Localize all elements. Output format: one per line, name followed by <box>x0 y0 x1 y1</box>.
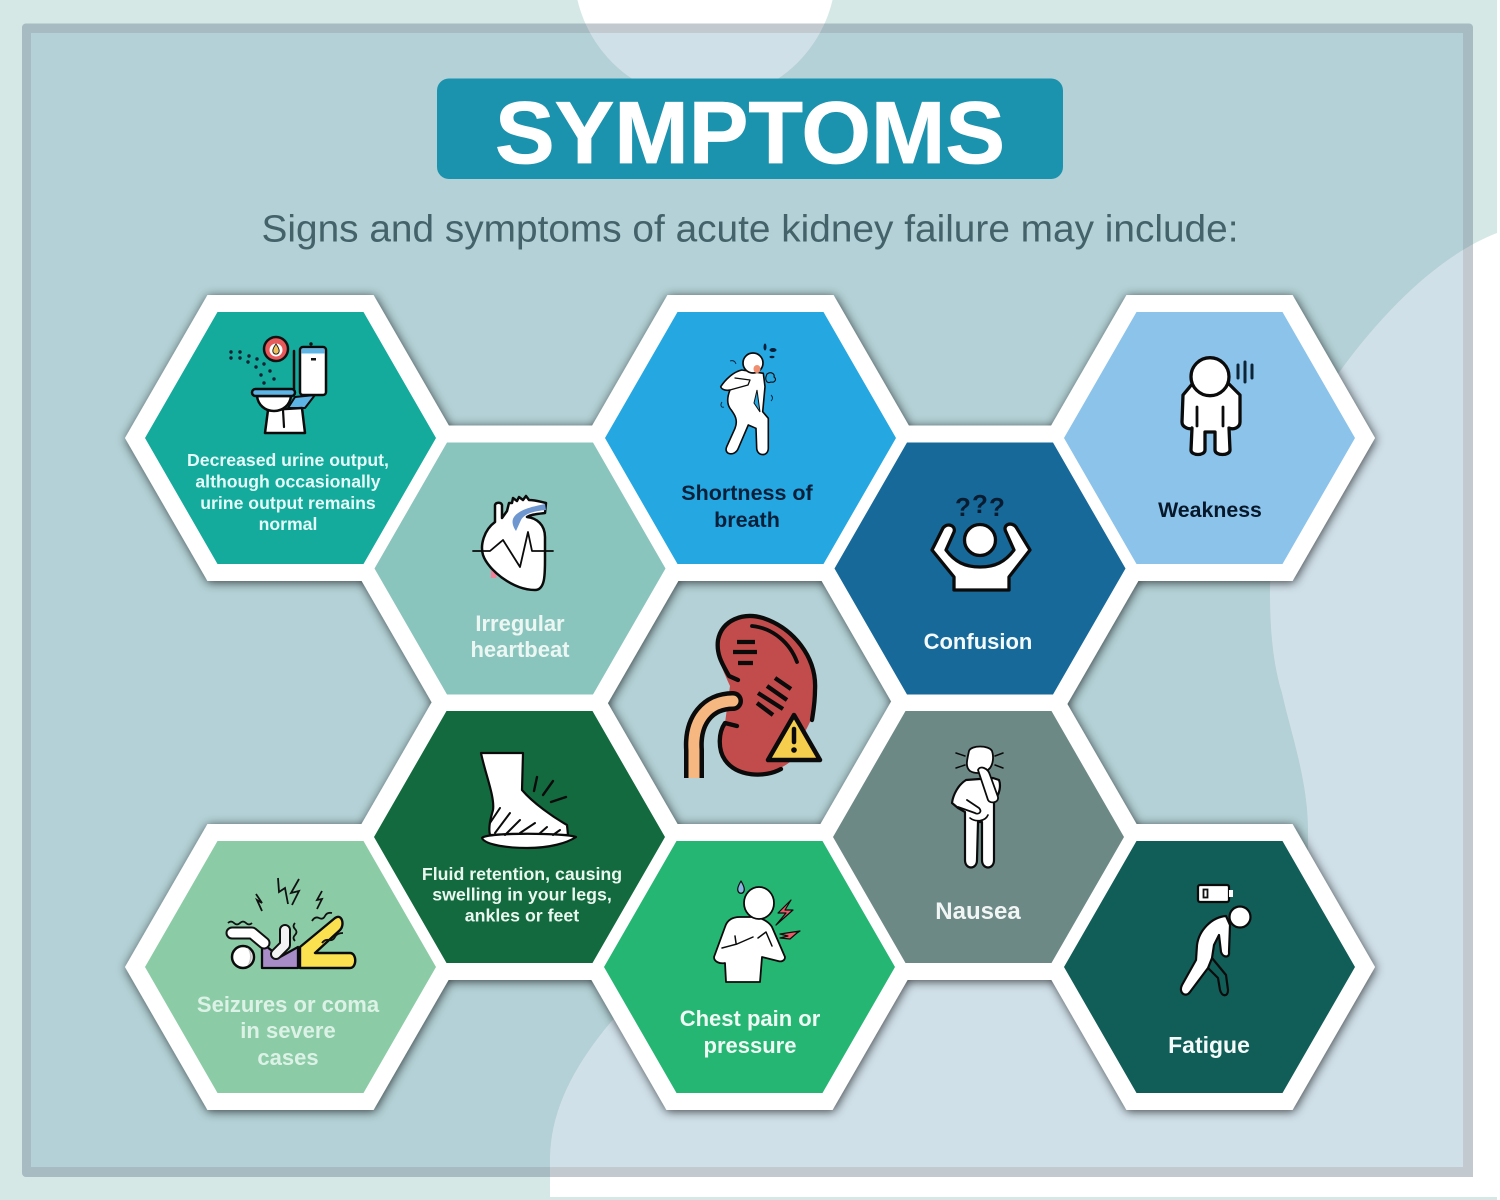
icon: person with question marks: ? <box>972 489 988 519</box>
label: pressure <box>704 1033 796 1058</box>
icon: swollen foot <box>481 753 576 848</box>
label: ankles or feet <box>465 906 579 926</box>
label: Fluid retention, causing <box>422 864 622 884</box>
icon: person with chest pain <box>714 881 800 982</box>
label <box>470 611 570 662</box>
label: Confusion <box>924 629 1032 654</box>
white hexagon honeycomb backing <box>125 295 1375 1110</box>
label: Irregular <box>475 611 565 636</box>
panel: nausea <box>833 711 1124 963</box>
icon: slumped figure <box>1182 358 1252 454</box>
title banner: SYMPTOMS <box>495 83 1005 182</box>
panel: chest pain <box>604 841 895 1093</box>
label <box>680 1006 821 1058</box>
label: in severe <box>240 1018 336 1043</box>
icon: tired person with low battery <box>1181 885 1250 995</box>
icon: person with question marks <box>932 489 1030 590</box>
label: swelling in your legs, <box>432 884 612 904</box>
label: heartbeat <box>470 637 570 662</box>
panel: fluid retention <box>374 711 665 963</box>
panel: weakness <box>1064 312 1355 564</box>
icon: central kidney with warning triangle <box>694 616 820 778</box>
label: Shortness of <box>681 481 814 505</box>
icon: nauseous person <box>952 746 1003 868</box>
panel: irregular heartbeat <box>374 442 666 694</box>
label: cases <box>257 1045 319 1070</box>
label: Fatigue <box>1168 1032 1250 1058</box>
panel: seizures or coma <box>145 841 436 1093</box>
label: although occasionally <box>195 472 381 492</box>
panel: decreased urine output <box>145 312 436 564</box>
panel: confusion <box>834 442 1126 694</box>
icon: person with question marks: ? <box>989 492 1005 522</box>
icon: person with question marks: ? <box>955 492 971 522</box>
panel: shortness of breath <box>605 312 896 564</box>
label: Decreased urine output, <box>187 450 389 470</box>
label <box>187 450 389 534</box>
label: Nausea <box>935 898 1021 925</box>
label: Chest pain or <box>680 1006 821 1031</box>
label: Weakness <box>1158 498 1262 522</box>
label: breath <box>714 508 780 532</box>
label: urine output remains <box>200 493 376 513</box>
panel: fatigue <box>1064 841 1355 1093</box>
icon: person having a seizure <box>228 878 355 968</box>
label: Seizures or coma <box>197 992 380 1017</box>
icon: heart with ECG line <box>473 496 553 590</box>
label <box>197 992 380 1070</box>
icon: person catching breath <box>721 344 776 455</box>
icon: toilet <box>229 337 326 433</box>
label <box>681 481 814 532</box>
label: normal <box>259 514 317 534</box>
label <box>422 864 622 926</box>
subtitle: Signs and symptoms of acute kidney failure may include: <box>262 208 1238 250</box>
